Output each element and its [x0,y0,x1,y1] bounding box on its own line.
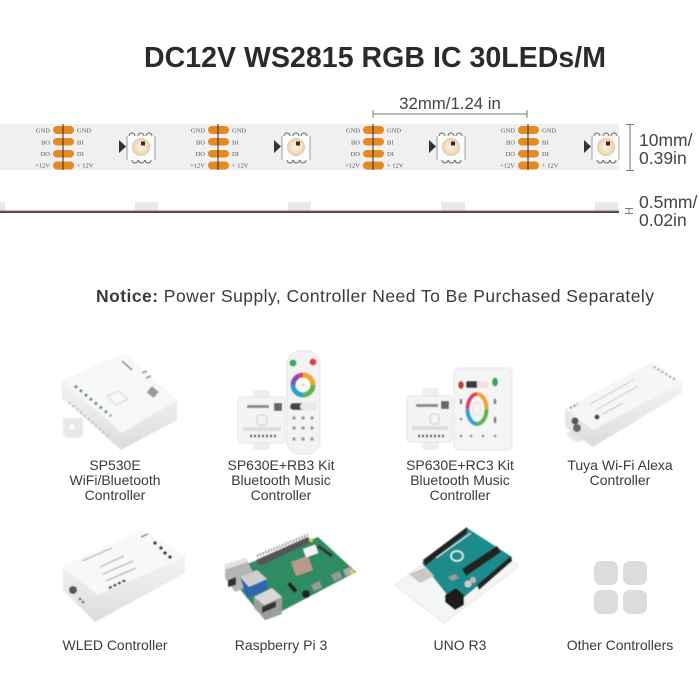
label: SP630E+RB3: Controller [251,487,312,503]
solder pads 1: BO [41,140,50,146]
solder pads 1: GND [77,128,91,134]
solder pads 4: + 12V [542,162,559,170]
notice text: Notice: Power Supply, Controller Need To Be Purchased Separately [96,286,654,306]
small controller [238,390,285,450]
solder pads 4: GND [542,128,556,134]
dimension: width 10mm [626,124,693,170]
solder pads 2: + 12V [232,162,249,170]
label: Raspberry Pi: Raspberry Pi 3 [235,637,328,653]
label: SP530E: SP530E [89,457,141,473]
solder pads 3 [345,124,404,170]
solder pads 3: DO [351,151,360,158]
icon: SP630E+RB3 kit [238,351,320,454]
label: SP530E: Controller [85,487,146,503]
solder pads 3: + 12V [387,162,404,170]
solder pads 4: BI [542,140,548,146]
dimension: width 10mm: 10mm/ [639,130,693,150]
solder pads 1: BI [77,140,84,146]
solder pads 2: BI [232,140,238,146]
solder pads 1: + 12V [77,162,94,170]
dimension: pitch 32mm: 32mm/1.24 in [399,94,501,113]
icon: Raspberry Pi 3 [225,535,356,620]
solder pads 2: GND [191,128,205,134]
LED chip 4 [584,133,619,163]
label: SP630E+RC3: Bluetooth Music [410,472,510,488]
remote [287,351,320,454]
solder pads 4: GND [501,128,515,134]
solder pads 3: GND [387,128,401,134]
solder pads 4: BO [506,140,515,146]
label: SP630E+RC3: Controller [430,487,491,503]
solder pads 2 [190,124,249,170]
wall panel [454,368,512,450]
label: SP630E+RC3: SP630E+RC3 Kit [406,457,514,473]
label: SP630E+RB3: SP630E+RB3 Kit [227,457,335,473]
solder pads 2: BO [196,140,205,146]
solder pads 4: DI [542,151,549,158]
label: SP530E: WiFi/Bluetooth [69,472,161,488]
solder pads 1: +12V [35,162,50,170]
LED strip top view [0,124,619,170]
icon: other controllers [594,561,647,614]
solder pads 3: BO [351,140,360,146]
solder pads 1: GND [36,128,50,134]
solder pads 2: +12V [190,162,205,170]
solder pads 1: DI [77,151,84,158]
solder pads 3: BI [387,140,394,146]
label: UNO: UNO R3 [434,637,487,653]
solder pads 3: DI [387,151,394,158]
dimension: thickness 0.5mm [625,192,697,230]
dimension: thickness 0.5mm: 0.02in [639,210,687,230]
solder pads 1: DO [41,151,50,158]
LED chip 3 [429,133,465,163]
icon: UNO R3 [395,527,518,623]
icon: Tuya Wi-Fi Alexa controller [565,362,682,447]
solder pads 3: +12V [345,162,360,170]
label: other: Other Controllers [567,637,673,653]
label: Tuya: Tuya Wi-Fi Alexa [567,457,673,473]
solder pads 1 [35,124,94,170]
LED strip side view [0,202,619,213]
dimension: thickness 0.5mm: 0.5mm/ [639,192,697,212]
solder pads 2: GND [232,128,246,134]
title: DC12V WS2815 RGB IC 30LEDs/M [144,42,606,74]
icon: SP530E controller [62,353,177,450]
icon: WLED controller [63,531,187,622]
label: WLED: WLED Controller [62,637,168,653]
icon: SP630E+RC3 kit [407,368,512,450]
solder pads 3: GND [346,128,360,134]
LED chip 1 [119,133,155,163]
dimension: pitch 32mm [373,94,527,118]
LED chip 2 [274,133,310,163]
solder pads 4: +12V [500,162,515,170]
solder pads 4 [500,124,559,170]
label: Tuya: Controller [590,472,651,488]
solder pads 4: DO [506,151,515,158]
dimension: width 10mm: 0.39in [639,148,687,168]
label: SP630E+RB3: Bluetooth Music [231,472,331,488]
solder pads 2: DO [196,151,205,158]
solder pads 2: DI [232,151,239,158]
small controller [407,388,452,450]
